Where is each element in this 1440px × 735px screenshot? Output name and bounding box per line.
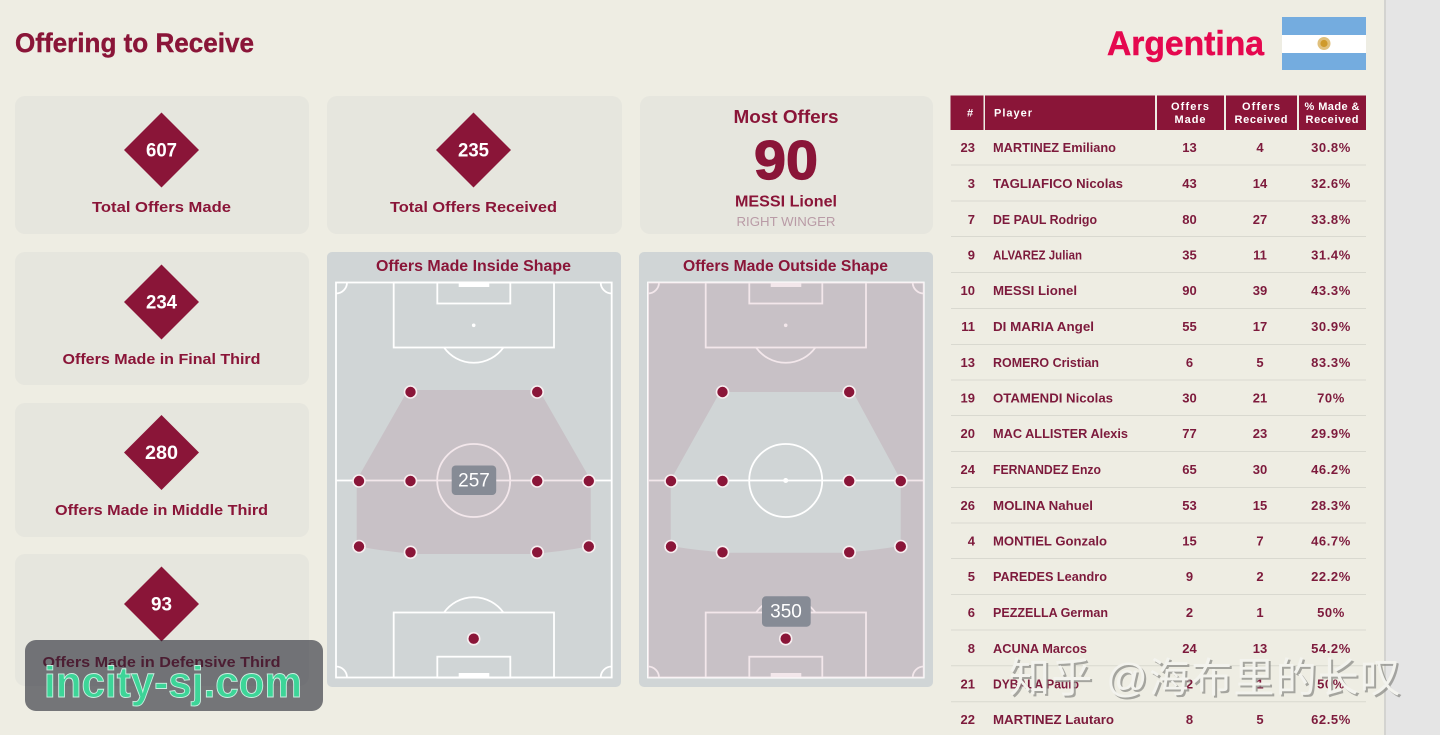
row: Paredes Leandro: 2 xyxy=(1256,569,1264,584)
panel: offers made inside shape xyxy=(327,252,621,687)
title: Offering to Receive xyxy=(15,28,254,58)
row: Martinez Lautaro xyxy=(961,712,1351,727)
row: Otamendi Nicolas xyxy=(961,390,1345,406)
watermark: incity-sj.com xyxy=(25,640,323,711)
row: Di Maria Angel: 55 xyxy=(1182,319,1197,334)
table header: # xyxy=(967,108,973,120)
panel: offers made in final third: Offers Made in Final Third xyxy=(62,351,260,368)
panel: total offers made xyxy=(15,96,309,234)
row: Molina Nahuel: MOLINA Nahuel xyxy=(993,498,1093,513)
country name: Argentina xyxy=(1107,25,1265,63)
row: Fernandez Enzo: 65 xyxy=(1182,462,1197,477)
table header: Received xyxy=(1306,114,1358,126)
row: Romero Cristian: 83.3% xyxy=(1311,355,1351,370)
panel: offers made in final third: 234 xyxy=(146,292,177,314)
row: Martinez Emiliano: 30.8% xyxy=(1311,140,1351,155)
row: De Paul Rodrigo: 27 xyxy=(1253,212,1267,227)
row: Martinez Lautaro: 8 xyxy=(1186,712,1193,727)
row: Pezzella German: 2 xyxy=(1186,605,1193,620)
row: Dybala Paulo: 2 xyxy=(1186,676,1193,692)
table header: Received xyxy=(1234,114,1288,126)
row: Messi Lionel: MESSI Lionel xyxy=(993,283,1077,298)
table header: Player xyxy=(994,108,1033,120)
row: Romero Cristian: ROMERO Cristian xyxy=(993,355,1099,370)
row: Tagliafico Nicolas: 43 xyxy=(1182,176,1197,191)
row: Alvarez Julian: 11 xyxy=(1253,248,1267,262)
row: Di Maria Angel: 17 xyxy=(1253,319,1267,334)
table header: Offers xyxy=(1242,101,1280,113)
panel: total offers received xyxy=(327,96,622,234)
panel: most offers: 90 xyxy=(754,129,818,191)
row: Montiel Gonzalo: 15 xyxy=(1182,534,1197,548)
row: Pezzella German: 1 xyxy=(1256,605,1264,620)
table header: Made xyxy=(1174,114,1206,126)
row: Martinez Emiliano xyxy=(961,140,1351,155)
row: Messi Lionel: 10 xyxy=(961,283,975,298)
row: De Paul Rodrigo xyxy=(968,212,1351,227)
table: player offers xyxy=(950,96,1366,727)
panel: offers made in final third xyxy=(15,252,309,385)
row: Tagliafico Nicolas: TAGLIAFICO Nicolas xyxy=(993,176,1123,191)
row: Martinez Lautaro: 22 xyxy=(961,712,975,727)
row: Otamendi Nicolas: OTAMENDI Nicolas xyxy=(993,390,1113,406)
row: Fernandez Enzo xyxy=(961,462,1351,477)
player dots xyxy=(665,386,907,645)
panel: total offers received: Total Offers Received xyxy=(390,199,557,216)
row: Fernandez Enzo: 24 xyxy=(961,462,976,477)
row: Otamendi Nicolas: 21 xyxy=(1253,390,1267,406)
panel: most offers: Most Offers xyxy=(734,107,838,127)
panel: offers made in defensive third: Offers Made in Defensive Third xyxy=(42,654,280,671)
panel: offers made in defensive third: 93 xyxy=(151,594,172,616)
value label: 257 xyxy=(452,466,496,495)
row: Martinez Emiliano: 13 xyxy=(1182,140,1197,155)
panel: offers made in middle third xyxy=(15,403,309,537)
row: Martinez Emiliano: MARTINEZ Emiliano xyxy=(993,140,1116,155)
panel: most offers: MESSI Lionel xyxy=(735,194,837,210)
row: Molina Nahuel: 26 xyxy=(961,498,975,513)
row: Acuna Marcos: ACUNA Marcos xyxy=(993,641,1087,656)
panel: total offers received: 235 xyxy=(458,140,489,162)
row: Romero Cristian xyxy=(961,355,1351,370)
panel: total offers made: 607 xyxy=(146,140,177,162)
row: Dybala Paulo: 21 xyxy=(961,676,975,692)
row: Molina Nahuel: 53 xyxy=(1182,498,1197,513)
panel: total offers made: Total Offers Made xyxy=(92,199,231,216)
row: Alvarez Julian: 9 xyxy=(968,248,975,262)
icon: Argentina flag xyxy=(1282,17,1366,70)
row: Otamendi Nicolas: 19 xyxy=(961,390,975,406)
watermark: zhihu author: 知乎 @海布里的长叹 xyxy=(1009,655,1401,701)
row: Tagliafico Nicolas: 32.6% xyxy=(1311,176,1351,191)
value label: 257: 257 xyxy=(458,470,490,492)
panel: offers made inside shape: Offers Made Inside Shape xyxy=(376,258,571,275)
row: Montiel Gonzalo: 7 xyxy=(1256,534,1264,548)
row: Paredes Leandro: 22.2% xyxy=(1311,569,1351,584)
row: Pezzella German: 6 xyxy=(968,605,975,620)
row: Molina Nahuel: 15 xyxy=(1253,498,1267,513)
row: Fernandez Enzo: 46.2% xyxy=(1311,462,1351,477)
row: Pezzella German: 50% xyxy=(1317,605,1345,620)
row: Mac Allister Alexis xyxy=(961,426,1351,441)
row: Mac Allister Alexis: MAC ALLISTER Alexis xyxy=(993,426,1128,441)
player dots xyxy=(353,386,595,645)
row: Fernandez Enzo: 30 xyxy=(1253,462,1267,477)
row: Dybala Paulo: DYBALA Paulo xyxy=(993,676,1079,692)
row: Paredes Leandro: 5 xyxy=(968,569,975,584)
row: De Paul Rodrigo: DE PAUL Rodrigo xyxy=(993,212,1097,227)
row: Acuna Marcos: 24 xyxy=(1182,641,1197,656)
value label: 350 xyxy=(762,596,811,627)
row: Mac Allister Alexis: 20 xyxy=(961,426,975,441)
row: Montiel Gonzalo: 46.7% xyxy=(1311,534,1351,548)
row: Montiel Gonzalo xyxy=(968,534,1351,548)
row: Martinez Lautaro: MARTINEZ Lautaro xyxy=(993,712,1114,727)
row: Paredes Leandro xyxy=(968,569,1351,584)
row: Dybala Paulo xyxy=(961,676,1345,692)
row: Martinez Emiliano: 4 xyxy=(1256,140,1264,155)
row: De Paul Rodrigo: 33.8% xyxy=(1311,212,1351,227)
row: Pezzella German xyxy=(968,605,1345,620)
row: Martinez Lautaro: 62.5% xyxy=(1311,712,1351,727)
row: Dybala Paulo: 1 xyxy=(1256,676,1264,692)
shaded inside shape xyxy=(357,390,591,554)
row: Alvarez Julian: ALVAREZ Julian xyxy=(993,248,1082,262)
row: Paredes Leandro: PAREDES Leandro xyxy=(993,569,1107,584)
row: Pezzella German: PEZZELLA German xyxy=(993,605,1108,620)
row: Alvarez Julian: 31.4% xyxy=(1311,248,1351,262)
row: Romero Cristian: 13 xyxy=(961,355,975,370)
panel: most offers xyxy=(640,96,933,234)
pitch lines xyxy=(648,282,924,678)
row: Mac Allister Alexis: 23 xyxy=(1253,426,1267,441)
row: Martinez Emiliano: 23 xyxy=(961,140,975,155)
row: Alvarez Julian xyxy=(968,248,1351,262)
value label: 350: 350 xyxy=(770,602,802,622)
row: Di Maria Angel: 30.9% xyxy=(1311,319,1351,334)
row: Mac Allister Alexis: 29.9% xyxy=(1311,426,1351,441)
pitch lines xyxy=(336,282,612,678)
row: Acuna Marcos: 8 xyxy=(968,641,975,656)
row: Di Maria Angel xyxy=(961,319,1351,334)
row: Montiel Gonzalo: MONTIEL Gonzalo xyxy=(993,534,1107,548)
panel: offers made outside shape: Offers Made Outside Shape xyxy=(683,258,888,275)
watermark: incity-sj.com: incity-sj.com xyxy=(44,658,302,707)
row: Messi Lionel: 39 xyxy=(1253,283,1267,298)
row: Romero Cristian: 5 xyxy=(1256,355,1264,370)
row: De Paul Rodrigo: 7 xyxy=(968,212,975,227)
table header: % Made & xyxy=(1304,101,1360,113)
row: Otamendi Nicolas: 30 xyxy=(1182,390,1197,406)
row: Romero Cristian: 6 xyxy=(1186,355,1193,370)
table header xyxy=(950,96,1366,130)
row: Acuna Marcos: 54.2% xyxy=(1311,641,1351,656)
watermark: zhihu author: 知乎 @海布里的长叹 xyxy=(1011,657,1403,703)
row: Tagliafico Nicolas: 3 xyxy=(968,176,975,191)
page margin strip xyxy=(1384,0,1440,735)
row: Fernandez Enzo: FERNANDEZ Enzo xyxy=(993,462,1101,477)
panel: offers made in middle third: Offers Made in Middle Third xyxy=(55,502,268,519)
row: Paredes Leandro: 9 xyxy=(1186,569,1193,584)
row: Dybala Paulo: 50% xyxy=(1317,676,1345,692)
row: Mac Allister Alexis: 77 xyxy=(1182,426,1197,441)
row: Montiel Gonzalo: 4 xyxy=(968,534,976,548)
row: Tagliafico Nicolas xyxy=(968,176,1351,191)
panel: offers made outside shape xyxy=(639,252,933,687)
row: Di Maria Angel: DI MARIA Angel xyxy=(993,319,1094,334)
panel: offers made in middle third: 280 xyxy=(145,443,178,464)
row: Messi Lionel xyxy=(961,283,1351,298)
row: Molina Nahuel xyxy=(961,498,1351,513)
row: Tagliafico Nicolas: 14 xyxy=(1253,176,1268,191)
table header: Offers xyxy=(1171,101,1209,113)
row: Messi Lionel: 43.3% xyxy=(1311,283,1351,298)
row: Alvarez Julian: 35 xyxy=(1182,248,1197,262)
row: Otamendi Nicolas: 70% xyxy=(1317,390,1345,406)
row: De Paul Rodrigo: 80 xyxy=(1182,212,1197,227)
panel: offers made in defensive third xyxy=(15,554,309,686)
panel: most offers: RIGHT WINGER xyxy=(736,214,836,229)
row: Martinez Lautaro: 5 xyxy=(1256,712,1264,727)
shaded outside shape xyxy=(648,282,924,678)
row: Acuna Marcos: 13 xyxy=(1253,641,1267,656)
row: Di Maria Angel: 11 xyxy=(961,319,975,334)
row: Molina Nahuel: 28.3% xyxy=(1311,498,1351,513)
row: Messi Lionel: 90 xyxy=(1182,283,1197,298)
row: Acuna Marcos xyxy=(968,641,1351,656)
